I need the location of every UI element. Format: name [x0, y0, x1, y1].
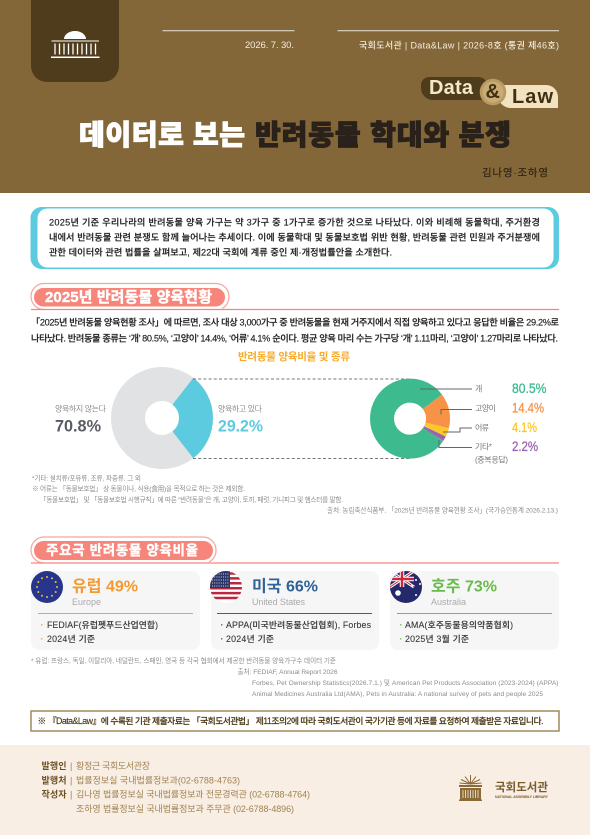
card: Europe: 2024년 기준: [47, 634, 95, 644]
legend: 고양이: [475, 403, 496, 413]
card: United States: ·: [220, 620, 224, 630]
card: United States: APPA(미국반려동물산업협회), Forbes: [226, 619, 372, 630]
publication credits: [42, 760, 310, 814]
country footnotes and sources: Animal Medicines Australia Ltd(AMA), Pets in Australia: A national survey of pets and people 2025: [252, 691, 543, 698]
card: Europe: [31, 571, 200, 650]
legal notice box: ※ 『Data&Law』에 수록된 기관 제출자료는 「국회도서관법」 제11조의2에 따라 국회도서관이 국가기관 등에 자료를 요청하여 제출받은 자료입니다.: [38, 715, 544, 726]
title: 반려동물 학대와 분쟁: [255, 120, 511, 150]
publication credits: 조하영 법률정보실 국내법률정보과 주무관 (02-6788-4896): [76, 804, 294, 814]
Data and Law logo: [421, 77, 558, 108]
country footnotes and sources: 출처: FEDIAF, Annual Report 2026: [238, 667, 338, 676]
card: Australia: Australia: [431, 597, 466, 607]
card: Australia: 호주 73%: [431, 578, 497, 596]
card: Australia: ·: [400, 620, 402, 630]
chart: ownership donut: 양육하지 않는다: [55, 404, 107, 414]
card: Europe: 유럽 49%: [72, 578, 138, 596]
section heading: 2025 ownership: 2025년 반려동물 양육현황: [45, 289, 212, 306]
card: Australia: ·: [400, 634, 402, 644]
chart footnotes: [32, 474, 558, 514]
card: Australia: [390, 571, 559, 650]
title: [79, 120, 511, 150]
publication credits: 발행처: [42, 774, 66, 786]
card: United States: 미국 66%: [252, 578, 318, 596]
footer: [0, 745, 590, 835]
publication credits: |: [70, 790, 72, 800]
card: United States: United States: [252, 597, 306, 607]
chart footnotes: *기타: 설치류/포유류, 조류, 파충류, 그 외: [32, 474, 141, 482]
country footnotes and sources: * 유럽: 프랑스, 독일, 이탈리아, 네덜란드, 스페인, 영국 등 각국 협회에서 제공한 반려동물 양육가구수 데이터 기준: [31, 656, 336, 665]
icon: EU flag: [31, 571, 63, 603]
card: Australia: AMA(호주동물용의약품협회): [405, 619, 513, 630]
authors: 김나영·조하영: [482, 166, 548, 179]
publication credits: |: [70, 761, 72, 771]
card: Europe: Europe: [72, 597, 101, 607]
card: Australia: 2025년 3월 기준: [405, 633, 469, 644]
icon: US flag: [210, 571, 242, 603]
chart: ownership donut: [55, 384, 263, 452]
section heading: countries: [31, 537, 559, 563]
National Assembly Library logo: 국회도서관: [495, 780, 548, 794]
chart: species donut: 80.5%: [512, 380, 546, 396]
legal notice box: [31, 711, 559, 731]
country footnotes and sources: [31, 656, 558, 698]
legend: 기타*: [475, 442, 492, 452]
publication info: 국회도서관 | Data&Law | 2026-8호 (통권 제46호): [359, 40, 559, 50]
publication credits: 작성자: [42, 788, 67, 800]
intro callout: [30, 207, 559, 269]
survey paragraph: [31, 316, 560, 344]
chart: species donut: 14.4%: [512, 400, 544, 416]
Data and Law logo: Data: [429, 77, 474, 99]
survey paragraph: 「2025년 반려동물 양육현황 조사」에 따르면, 조사 대상 3,000가구 중 반려동물을 현재 거주지에서 직접 양육하고 있다고 응답한 비율은 29.2%로: [31, 316, 560, 328]
publication credits: 김나영 법률정보실 국내법률정보과 전문경력관 (02-6788-4764): [76, 788, 310, 800]
chart footnotes: 출처: 농림축산식품부, 「2025년 반려동물 양육현황 조사」(국가승인통계 2026.2.13.): [327, 506, 558, 514]
Data and Law logo: Law: [512, 86, 553, 108]
publication credits: |: [70, 776, 72, 786]
intro callout: 2025년 기준 우리나라의 반려동물 양육 가구는 약 3가구 중 1가구로 증가한 것으로 나타났다. 이와 비례해 동물학대, 주거환경: [49, 216, 540, 228]
National Assembly Library logo: NATIONAL ASSEMBLY LIBRARY: [495, 795, 549, 799]
chart: ownership donut: 양육하고 있다: [218, 404, 263, 414]
card: United States: 2024년 기준: [226, 634, 274, 644]
chart footnotes: 「동물보호법」 및 「동물보호법 시행규칙」에 따른 “반려동물”은 개, 고양이, 토끼, 페럿, 기니피그 및 햄스터를 말함.: [40, 495, 343, 504]
intro callout: 내에서 반려동물 관련 분쟁도 함께 늘어나는 추세이다. 이에 동물학대 및 동물보호법 위반 현황, 반려동물 관련 민원과 주거분쟁에: [49, 232, 540, 242]
header band: [0, 0, 590, 193]
publication credits: 법률정보실 국내법률정보과(02-6788-4763): [76, 776, 240, 786]
title: 데이터로 보는: [79, 120, 245, 150]
National Assembly Library logo: [459, 775, 549, 801]
publication credits: 발행인: [42, 760, 66, 771]
chart: ownership donut: 29.2%: [218, 416, 263, 436]
card: Europe: ·: [40, 634, 44, 644]
chart: species donut: 4.1%: [512, 419, 537, 435]
intro callout: 관한 데이터와 관련 법률을 살펴보고, 제22대 국회에 계류 중인 제·개정법률안을 소개한다.: [49, 246, 392, 258]
chart title: 반려동물 양육비율 및 종류: [238, 350, 350, 363]
card: United States: [210, 571, 379, 650]
issue date: 2026. 7. 30.: [245, 40, 294, 51]
section heading: countries: 주요국 반려동물 양육비율: [46, 543, 198, 558]
card: United States: ·: [220, 634, 224, 644]
leader lines: [420, 389, 472, 448]
legend: 어류: [475, 422, 489, 432]
chart: species donut: 2.2%: [512, 438, 538, 454]
legend: [475, 384, 508, 464]
legend: 개: [475, 384, 482, 394]
chart: species donut: [382, 380, 546, 464]
card: Europe: ·: [40, 620, 44, 630]
chart: ownership donut: 70.8%: [55, 416, 101, 436]
section heading: 2025 ownership: [31, 284, 559, 310]
country footnotes and sources: Forbes, Pet Ownership Statistics(2026.7.1.) 및 American Pet Products Association (2023-2024) (APPA): [252, 679, 558, 687]
icon: Australia flag: [390, 571, 422, 603]
publication credits: 황정근 국회도서관장: [76, 761, 150, 771]
chart footnotes: ※ 어류는 「동물보호법」 상 동물이나, 식용(食用)을 목적으로 하는 것은 제외함.: [32, 484, 245, 493]
survey paragraph: 나타났다. 반려동물 종류는 ‘개’ 80.5%, ‘고양이’ 14.4%, ‘어류’ 4.1% 순이다. 평균 양육 마리 수는 가구당 ‘개’ 1.11마리, ‘고양이’ 1.27마리로 나타났다.: [31, 332, 558, 344]
header logo badge: [31, 0, 119, 82]
Data and Law logo: &: [486, 81, 500, 103]
legend: (중복응답): [475, 454, 508, 464]
card: Europe: FEDIAF(유럽펫푸드산업연합): [47, 619, 158, 630]
